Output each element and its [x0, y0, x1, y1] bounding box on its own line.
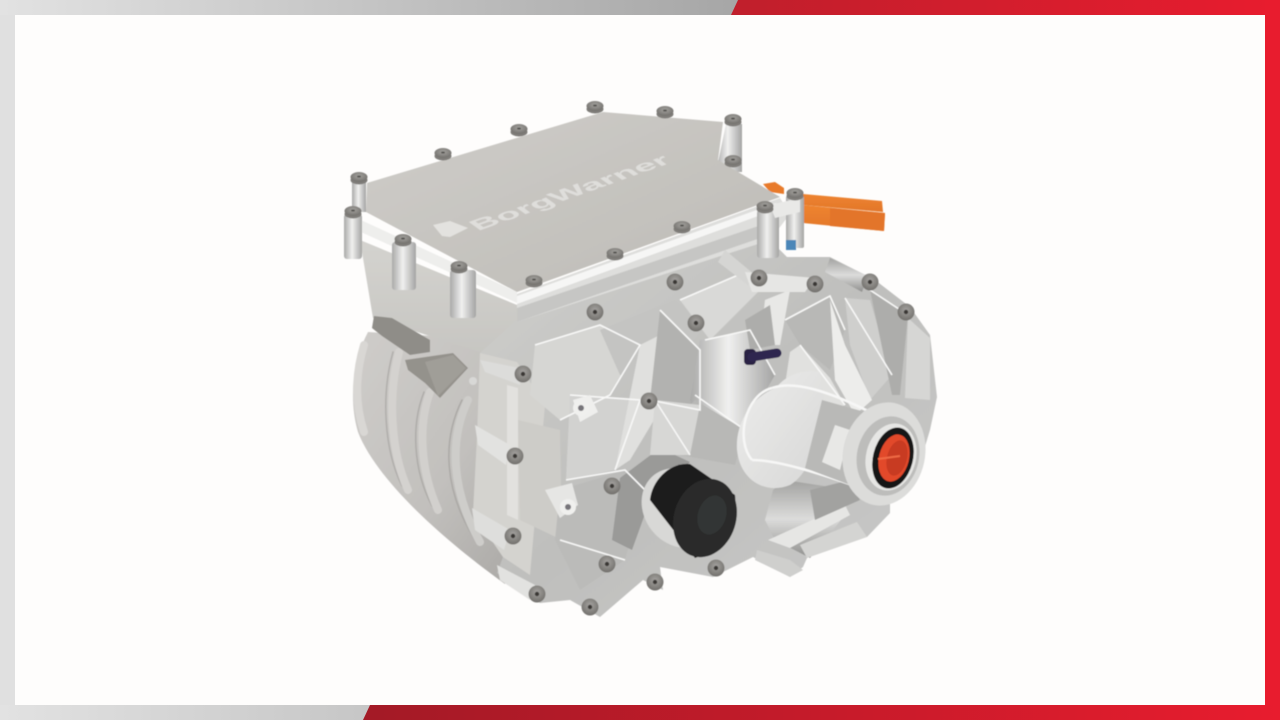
bright casting edge lines	[535, 272, 908, 560]
coolant fittings	[372, 316, 477, 398]
gearbox housing body	[473, 240, 937, 617]
frame: bottom grey bar	[0, 705, 372, 720]
fastener bolts: gearbox	[504, 270, 914, 616]
frame: right red edge	[1265, 0, 1280, 720]
output shaft hub	[833, 395, 935, 513]
red output spline	[874, 431, 914, 485]
cover rim highlight	[517, 198, 790, 322]
inverter box side	[360, 240, 517, 362]
motor rib bands	[357, 345, 480, 542]
output shaft seal	[866, 423, 920, 493]
lower gearbox cover	[755, 480, 867, 577]
gearbox cover ribs	[745, 290, 930, 415]
open threaded bosses	[560, 400, 589, 515]
frame: left grey edge	[0, 0, 15, 720]
housing lugs	[472, 250, 868, 600]
black pulley	[626, 453, 747, 566]
purple coolant nipple	[744, 349, 777, 365]
product photo: electric drive module	[344, 101, 937, 617]
gearbox surface panels	[530, 272, 775, 590]
pulley front face	[663, 470, 747, 566]
logo emblem	[433, 221, 468, 237]
inverter top cover plate	[366, 112, 780, 292]
fastener bolts: top row	[344, 101, 804, 288]
orange cable connectors	[763, 182, 885, 231]
logo on cover	[433, 152, 676, 237]
cover rib lines	[744, 385, 870, 485]
inverter mounting lugs	[344, 124, 804, 318]
logo wordmark: BorgWarner	[464, 152, 676, 234]
electric motor housing	[353, 332, 530, 584]
frame: top grey bar	[0, 0, 740, 15]
inverter cover rim left	[350, 215, 517, 303]
rear flange	[473, 353, 562, 575]
frame: bottom red bar	[363, 705, 1280, 720]
frame: top red bar	[731, 0, 1280, 15]
sealed round cover	[737, 371, 823, 488]
centre link between cover and hub	[805, 400, 865, 485]
